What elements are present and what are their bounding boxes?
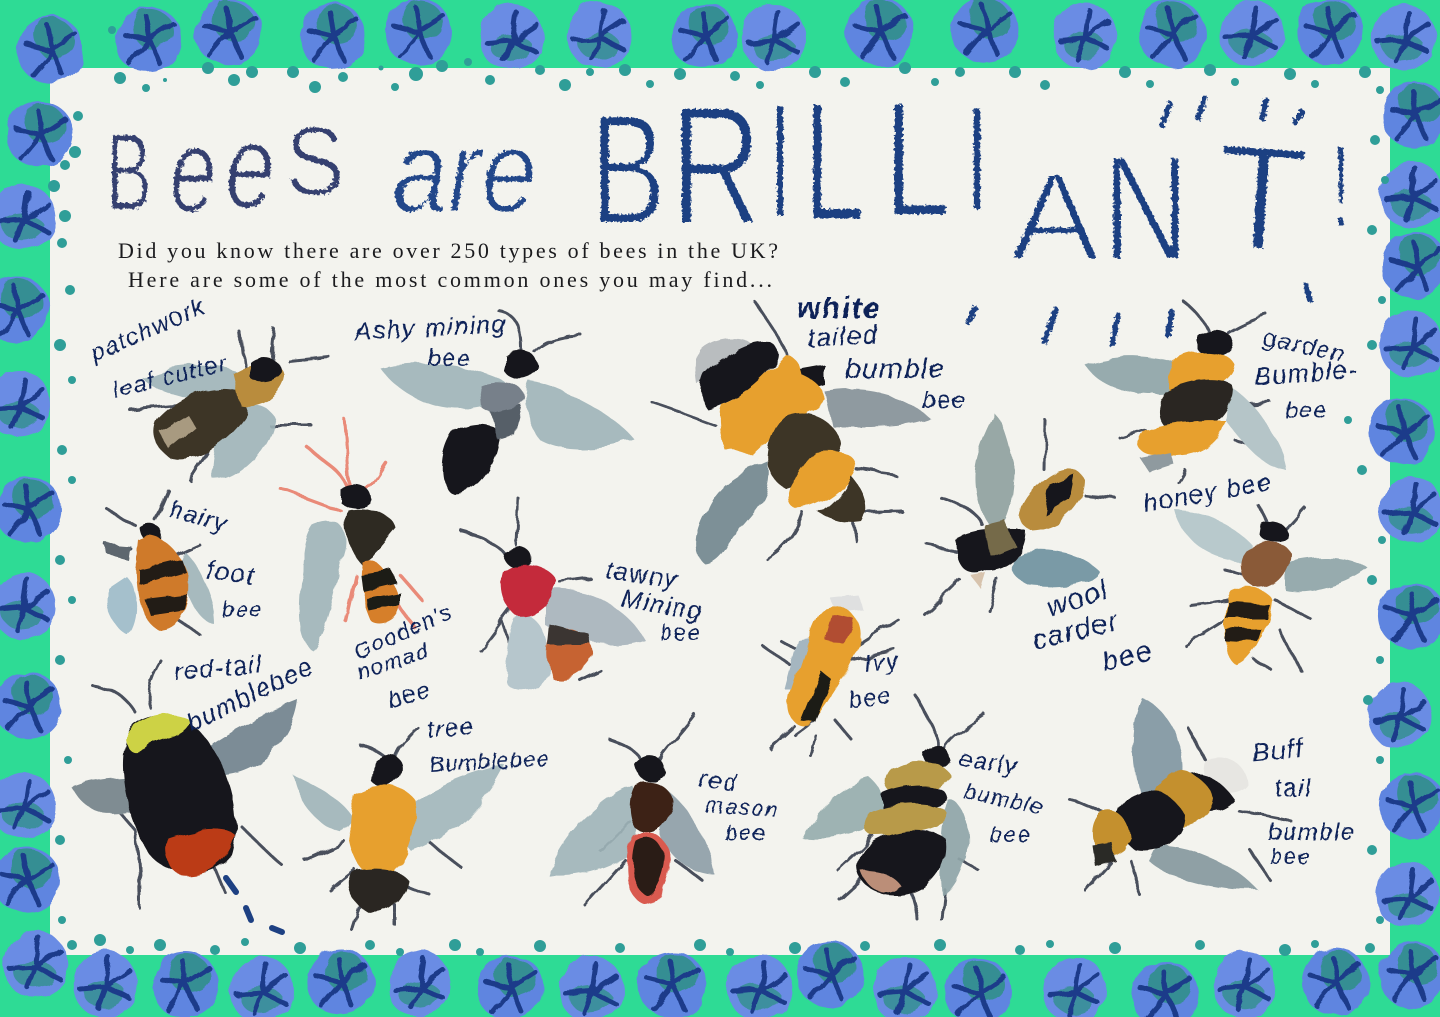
title: Brilliant: L	[803, 67, 865, 257]
label: buff tail bumble bee: bee	[1270, 844, 1311, 869]
bee: ivy	[762, 595, 898, 755]
label: red mason bee	[697, 765, 780, 845]
title: Bees are	[106, 100, 537, 238]
label: hairy foot bee: hairy	[166, 496, 231, 538]
label: buff tail bumble bee	[1250, 733, 1356, 869]
intro text: Here are some of the most common ones you may find...	[128, 267, 772, 292]
label: early bumble bee: early	[957, 745, 1020, 780]
label: patchwork leaf cutter: leaf cutter	[110, 349, 230, 403]
bees	[72, 300, 1368, 930]
bee: red mason	[548, 715, 715, 905]
bee: garden bumble	[1085, 300, 1288, 482]
label: white tailed bumble bee: bumble	[845, 353, 946, 384]
title: Brilliant: T	[1209, 111, 1313, 285]
label: garden bumble bee: garden	[1261, 324, 1348, 368]
label: white tailed bumble bee	[797, 292, 967, 414]
bee: tree bumblebee	[293, 728, 505, 930]
bee: tawny mining	[462, 498, 645, 691]
label: early bumble bee: bumble	[962, 778, 1047, 820]
label: ashy mining bee: Ashy mining	[352, 310, 508, 346]
bee: ashy mining	[380, 312, 635, 495]
title: Brilliant: A	[1010, 148, 1101, 287]
label: white tailed bumble bee: bee	[922, 387, 967, 414]
label: red-tail bumblebee: red-tail	[173, 650, 264, 686]
title: Brilliant: !	[1330, 120, 1352, 254]
label: hairy foot bee: foot	[204, 554, 258, 591]
label: early bumble bee: bee	[990, 822, 1031, 847]
label: hairy foot bee	[166, 496, 263, 622]
bee: honey	[1175, 505, 1368, 670]
bee: early bumble	[802, 695, 985, 920]
label: tawny mining bee: Mining	[619, 584, 705, 626]
label: garden bumble bee	[1253, 324, 1359, 423]
crayon dashes near red-tail bee	[226, 878, 282, 932]
title: Brilliant: L	[883, 67, 951, 251]
bee: wool carder	[925, 415, 1115, 615]
title: Bees are: are	[392, 106, 537, 238]
label: patchwork leaf cutter: patchwork	[86, 293, 210, 368]
label: buff tail bumble bee: Buff	[1250, 733, 1307, 768]
title: Brilliant: I	[964, 74, 990, 244]
label: wool carder bee: wool	[1042, 574, 1112, 623]
label: Gooden's nomad bee: bee	[385, 676, 435, 714]
label: tawny mining bee	[604, 556, 705, 645]
title: Brilliant: I	[768, 69, 792, 253]
label: tawny mining bee: tawny	[604, 556, 680, 594]
label: red mason bee: bee	[725, 820, 766, 845]
label: wool carder bee: carder	[1029, 604, 1122, 656]
label: ashy mining bee: bee	[428, 345, 471, 371]
label: ivy bee: Ivy	[863, 647, 901, 678]
label: Gooden's nomad bee: nomad	[354, 638, 433, 685]
label: wool carder bee: bee	[1098, 634, 1156, 678]
bee: white tailed bumble	[653, 302, 930, 564]
bee: buff tail bumble	[1068, 698, 1290, 895]
label: Gooden's nomad bee	[350, 599, 456, 714]
intro text: Did you know there are over 250 types of bees in the UK?	[118, 238, 778, 263]
title: Brilliant: N	[1102, 124, 1190, 292]
title: Bees are: B	[106, 111, 152, 234]
label: patchwork leaf cutter	[86, 293, 230, 403]
bee: red-tail bumble	[72, 660, 298, 908]
intro text	[118, 238, 778, 292]
label: buff tail bumble bee: bumble	[1268, 819, 1356, 846]
title: Brilliant: R	[670, 71, 762, 261]
label: red-tail bumblebee: bumblebee	[182, 652, 318, 737]
title: Bees are: e	[225, 100, 275, 234]
bee labels	[86, 292, 1359, 869]
title: Bees are: e	[170, 104, 216, 238]
bee: patchwork leaf cutter	[130, 330, 330, 480]
title: Brilliant	[590, 67, 1352, 292]
bee: hairy foot	[105, 490, 215, 636]
label: white tailed bumble bee: tailed	[807, 319, 879, 353]
label: red mason bee: mason	[705, 792, 780, 822]
label: white tailed bumble bee: white	[797, 292, 881, 325]
label: hairy foot bee: bee	[222, 597, 263, 622]
label: tree bumblebee	[426, 713, 550, 777]
label: ivy bee: bee	[847, 681, 893, 713]
label: garden bumble bee: bee	[1285, 397, 1328, 423]
title: Brilliant: B	[590, 82, 666, 258]
label: tawny mining bee: bee	[660, 620, 701, 645]
title: radiating crayon marks	[968, 98, 1310, 345]
label: tree bumblebee: Bumblebee	[429, 746, 550, 777]
label: garden bumble bee: Bumble-	[1253, 356, 1359, 391]
label: tree bumblebee: tree	[426, 713, 476, 744]
label: red mason bee: red	[697, 765, 740, 797]
bee: Gooden's nomad	[280, 420, 422, 650]
label: wool carder bee	[1029, 574, 1156, 678]
label: early bumble bee	[957, 745, 1047, 847]
label: ashy mining bee	[352, 310, 508, 371]
label: buff tail bumble bee: tail	[1275, 775, 1312, 802]
title: Bees are: S	[285, 106, 345, 216]
label: ivy bee	[847, 647, 901, 713]
title	[106, 67, 1352, 345]
label: Gooden's nomad bee: Gooden's	[350, 599, 456, 665]
label: honey bee: honey bee	[1141, 468, 1274, 518]
